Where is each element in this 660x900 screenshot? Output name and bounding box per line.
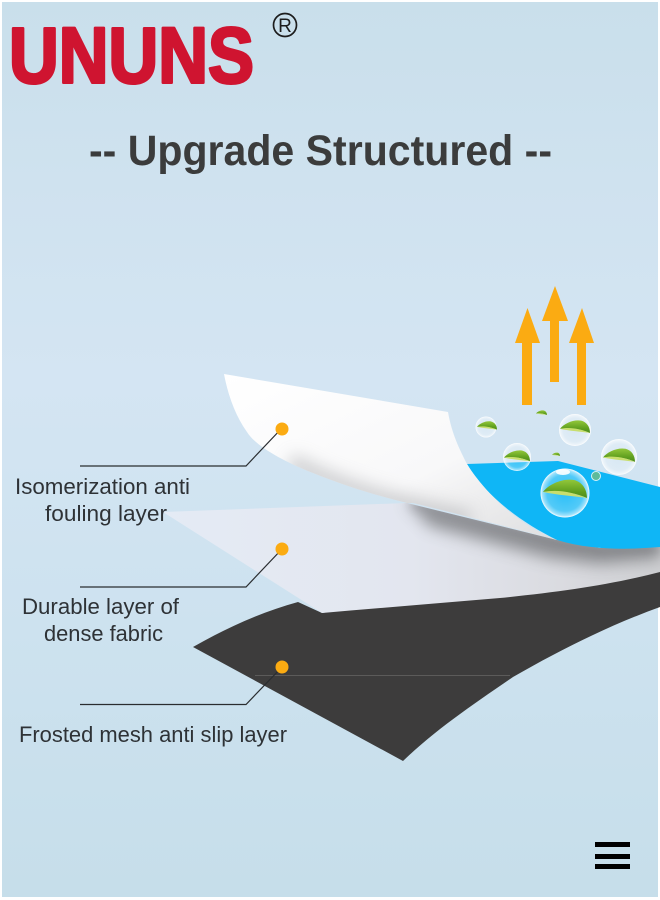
title: -- Upgrade Structured --: [89, 127, 552, 175]
bubble 5: [540, 468, 590, 518]
bubble 6: [592, 472, 600, 480]
label: anti slip layer: Frosted mesh anti slip layer: [19, 722, 287, 747]
logo: UNUNS: [9, 10, 254, 100]
bubble 4: [601, 439, 637, 475]
layer: white anti fouling sheet: [224, 374, 557, 540]
callout 2: [22, 542, 288, 646]
callout 1: [15, 422, 288, 526]
label: anti fouling layer: fouling layer: [45, 501, 167, 526]
orange arrows: [515, 286, 594, 405]
registered mark: R: [278, 16, 292, 37]
icon: menu: [595, 842, 630, 869]
layer: light dense fabric sheet: [163, 500, 660, 613]
label: durable layer: Durable layer of: [22, 594, 180, 619]
leaf small top: [536, 410, 547, 415]
leaf small lower: [552, 453, 560, 456]
label: durable layer: [22, 594, 180, 646]
label: durable layer: dense fabric: [44, 621, 163, 646]
bubble 3: [559, 414, 591, 446]
registered mark: [274, 14, 296, 37]
label: anti fouling layer: [15, 474, 190, 526]
water bubbles with leaves: [476, 410, 637, 518]
bubble 2: [503, 443, 531, 471]
layer: blue underside of top sheet: [467, 461, 660, 549]
arrow: left: [515, 308, 540, 405]
label: anti fouling layer: Isomerization anti: [15, 474, 190, 499]
arrow: right: [569, 308, 594, 405]
bubble 1: [476, 416, 497, 438]
arrow: centre: [542, 286, 568, 382]
callout 3: [19, 660, 288, 747]
faint seam on dark sheet: [255, 674, 510, 676]
layer: dark frosted mesh sheet: [193, 560, 660, 761]
